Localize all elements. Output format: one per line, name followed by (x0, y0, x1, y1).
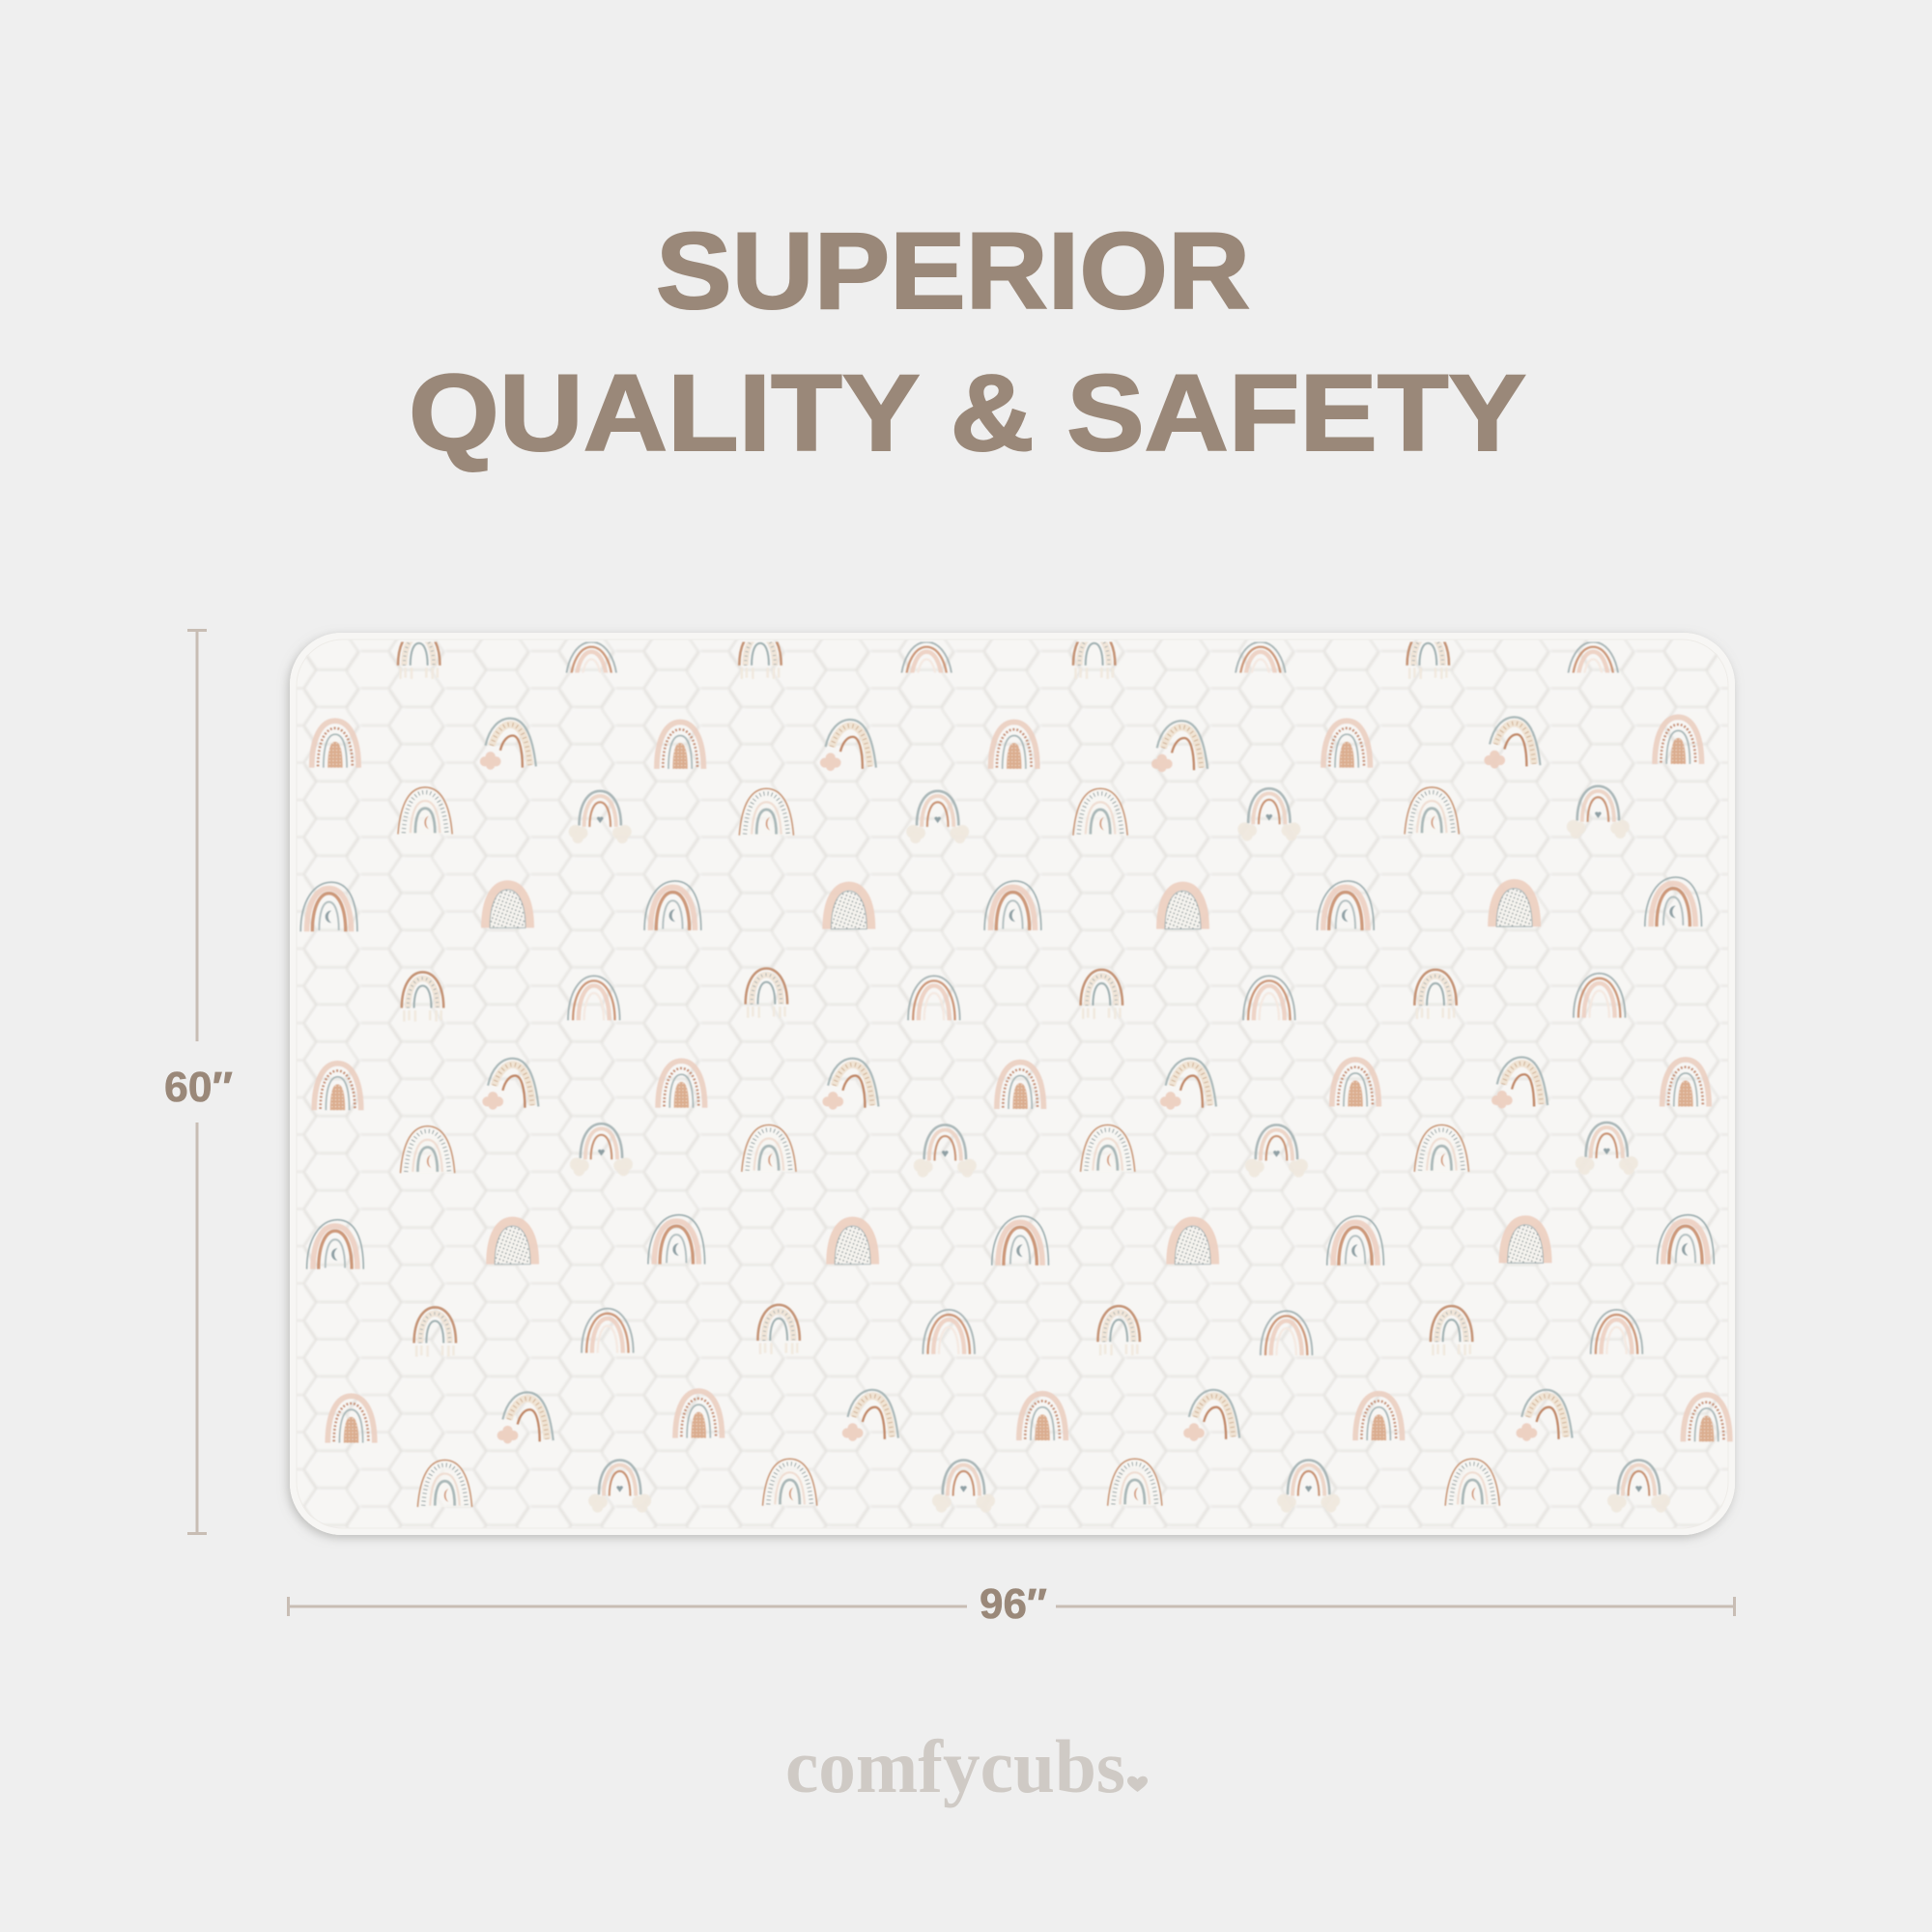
title (409, 211, 1526, 473)
rainbow row 5 (402, 969, 1625, 1021)
width label: 96″ (980, 1580, 1047, 1628)
icon: heart (1127, 1776, 1148, 1792)
quilted honeycomb stitching (290, 633, 1735, 1535)
rainbow row 8 (307, 1215, 1714, 1269)
title: QUALITY & SAFETY (409, 353, 1526, 473)
logo: comfycubs: comfycubs (785, 1724, 1125, 1808)
width dimension line (287, 1597, 1736, 1616)
rainbow row 3 (398, 786, 1630, 843)
height label: 60″ (164, 1064, 233, 1111)
rainbow row 11 (417, 1459, 1670, 1513)
rainbow row 9 (414, 1305, 1642, 1356)
rainbow row 4 (300, 877, 1701, 931)
rainbow row 6 (314, 1057, 1709, 1110)
panel: quilted play mat (290, 633, 1735, 1535)
rainbow row 1, clipped by top edge (396, 641, 1619, 679)
rainbow print pattern (300, 630, 1730, 1513)
rainbow row 2 (312, 717, 1701, 772)
title: SUPERIOR (656, 211, 1250, 331)
height dimension line (187, 629, 207, 1535)
rainbow row 7 (401, 1122, 1638, 1178)
rainbow row 10 (327, 1390, 1730, 1443)
